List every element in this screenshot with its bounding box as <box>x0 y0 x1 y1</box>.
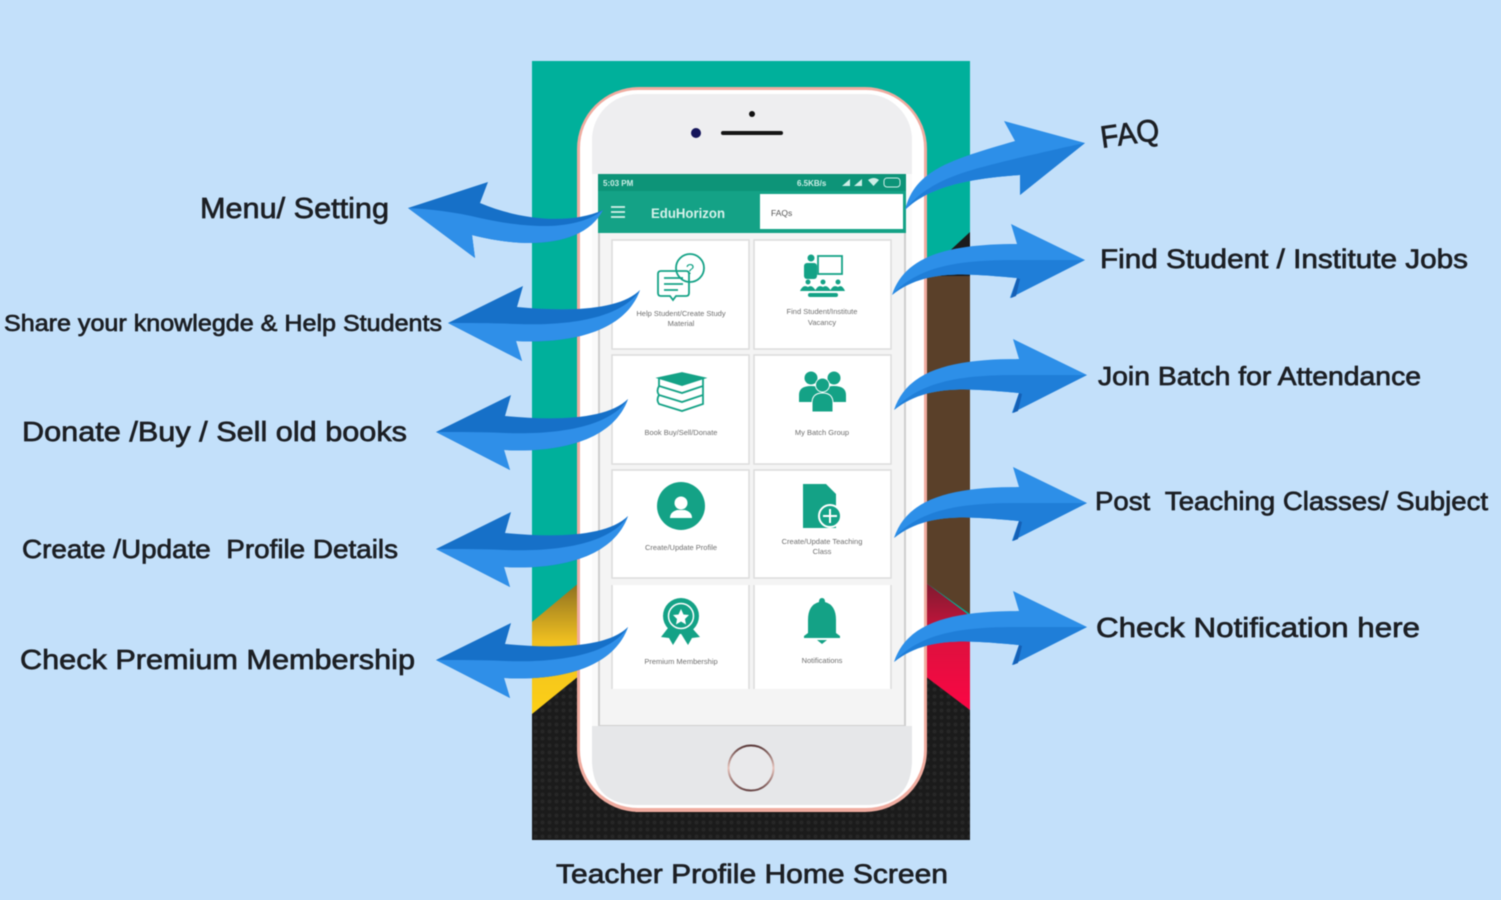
label: My Batch Group <box>795 428 849 437</box>
status bar <box>598 174 906 191</box>
card: teaching class <box>782 484 862 556</box>
label: Premium: Check Premium Membership <box>20 644 415 675</box>
label: Create/Update Teaching <box>782 537 862 546</box>
home button <box>728 746 774 790</box>
icon: bell <box>804 598 840 644</box>
card: profile <box>645 482 717 552</box>
card: notifications <box>802 598 843 665</box>
phone body <box>577 87 927 812</box>
arrow: to Find Student <box>892 224 1085 298</box>
status bar: 6.5KB/s <box>797 179 827 188</box>
panel: phone <box>577 87 927 812</box>
caption: Teacher Profile Home Screen <box>556 859 948 889</box>
arrow: to FAQ <box>905 121 1085 210</box>
label: Post Teaching: Post Teaching Classes/ Subject <box>1095 486 1489 516</box>
status bar: 5:03 PM <box>603 179 634 188</box>
icon: award ribbon <box>661 598 700 645</box>
card: batch group <box>795 372 849 437</box>
icon: group of people <box>799 372 846 412</box>
label: Create profile: Create /Update Profile Details <box>22 534 398 564</box>
label: Notification: Check Notification here <box>1096 612 1420 643</box>
icon: profile circle <box>657 482 705 530</box>
arrow: to Notification <box>894 591 1087 665</box>
label: Share knowledge: Share your knowlegde & Help Students <box>4 310 442 336</box>
icon: teacher with students <box>800 254 845 297</box>
label: Premium Membership <box>644 657 718 666</box>
screen <box>598 174 906 726</box>
app bar: EduHorizon <box>651 205 725 221</box>
label: Donate books: Donate /Buy / Sell old books <box>22 416 407 447</box>
card: books <box>645 373 717 437</box>
panel: colored phone backdrop <box>532 61 970 840</box>
label: Create/Update Profile <box>645 543 717 552</box>
arrow: to Share knowledge <box>448 286 640 361</box>
app bar <box>598 191 906 233</box>
label: Join Batch: Join Batch for Attendance <box>1098 361 1421 391</box>
label: Class <box>813 547 832 556</box>
label: Find Student/Institute <box>787 307 857 316</box>
label: Book Buy/Sell/Donate <box>645 428 717 437</box>
app bar: FAQs <box>771 208 792 218</box>
cards <box>612 240 891 689</box>
arrow: to Menu <box>408 182 603 258</box>
label: Find Student: Find Student / Institute Jobs <box>1100 244 1468 274</box>
camera and speaker <box>691 111 783 138</box>
label: Vacancy <box>808 318 836 327</box>
arrow: to Join Batch <box>894 339 1087 413</box>
arrow: to Donate books <box>436 395 628 470</box>
label: Help Student/Create Study <box>636 309 726 318</box>
icon: document with plus <box>803 484 841 528</box>
arrow: to Premium <box>436 623 628 698</box>
arrow: to Profile <box>436 512 628 587</box>
icon: chat bubbles: ? <box>686 261 694 278</box>
label: Menu: Menu/ Setting <box>200 193 389 225</box>
label: Material <box>668 319 695 328</box>
card: find vacancy <box>787 254 857 327</box>
card: help students <box>636 254 726 328</box>
label: Notifications <box>802 656 843 665</box>
arrow: to Post Teaching <box>894 467 1087 541</box>
icon: stack of books <box>658 373 704 411</box>
label: FAQ: FAQ <box>1098 112 1161 155</box>
card: premium <box>644 598 718 666</box>
